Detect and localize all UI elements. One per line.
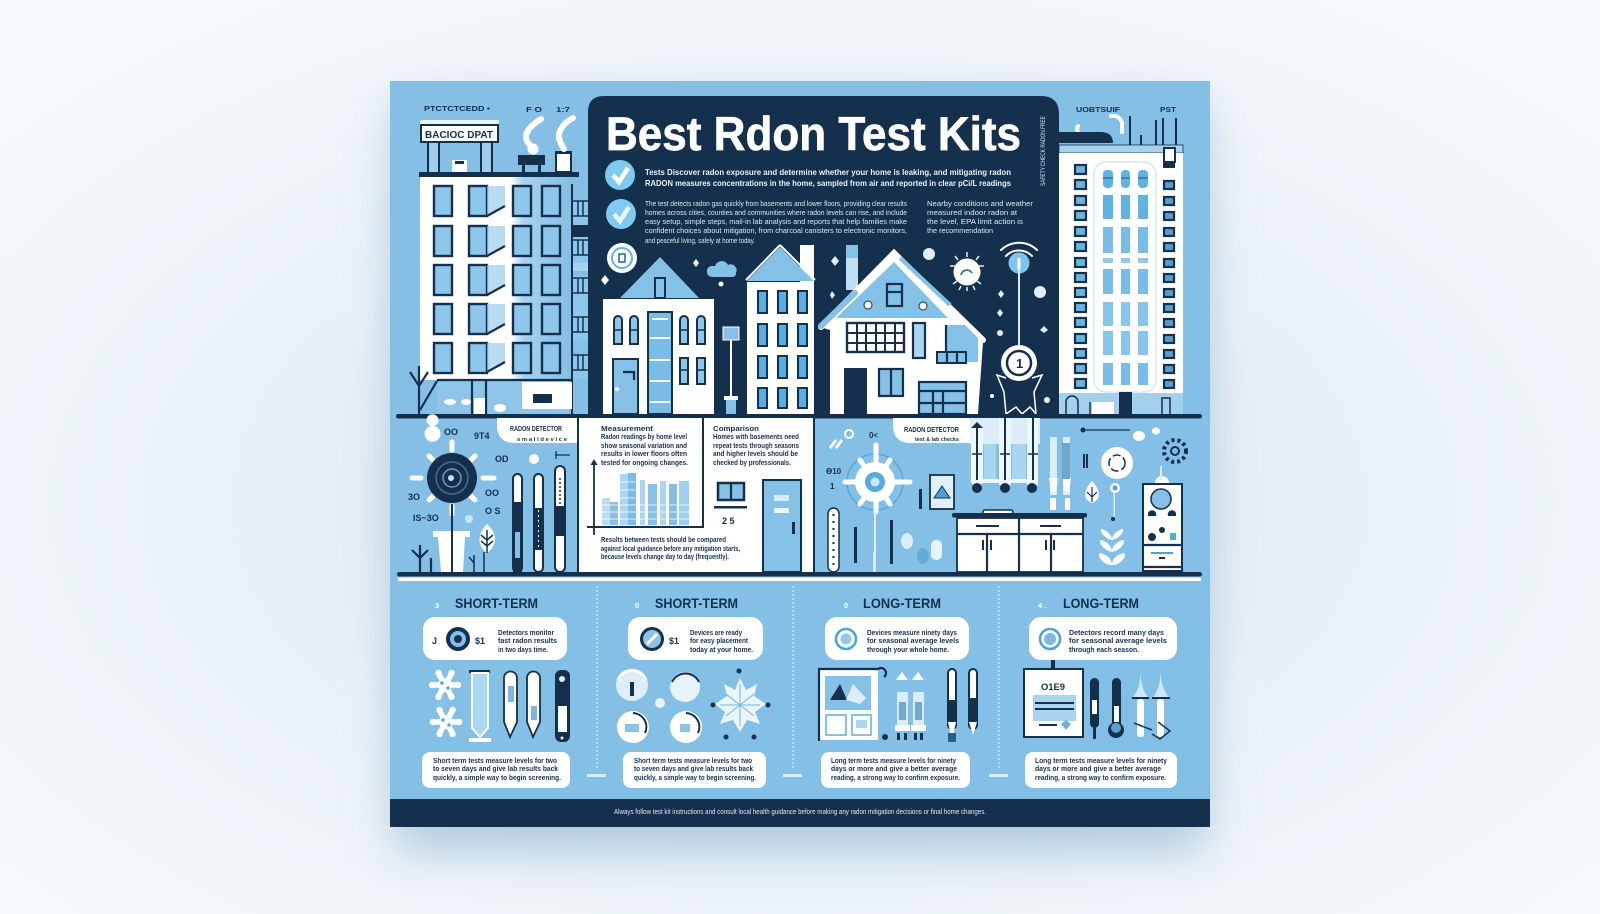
ground line 2	[397, 572, 1202, 576]
heading: SHORT-TERM	[655, 595, 738, 611]
left apartment building	[410, 104, 588, 414]
footer bar	[390, 799, 1210, 827]
bar chart	[602, 473, 689, 525]
text card	[623, 752, 766, 788]
centre windows	[1103, 170, 1148, 385]
intro text	[645, 167, 1011, 188]
info card: Devices are ready	[690, 628, 743, 637]
text card	[422, 752, 570, 788]
gear badge	[1164, 440, 1186, 462]
text card: Short term tests measure levels for two	[634, 756, 752, 765]
info card	[628, 617, 763, 660]
building body	[420, 176, 572, 380]
body text column 2	[927, 199, 1034, 235]
sample vials	[895, 672, 926, 740]
test wand 3	[555, 466, 565, 572]
tower base	[1059, 393, 1183, 414]
counter with cabinets	[952, 510, 1087, 572]
thermometer pair	[1049, 437, 1071, 510]
info card: for seasonal average levels	[867, 636, 959, 645]
body text column 1: The test detects radon gas quickly from basements and lower floors, providing clear results	[645, 199, 907, 208]
townhouse left	[603, 257, 714, 414]
gauge labels: OD	[495, 454, 509, 464]
column 1: short-term	[422, 595, 570, 788]
text card: to seven days and give lab results back	[433, 764, 559, 773]
scale and tools: Ɵ10	[826, 467, 842, 476]
tower label: UOBTSUIF	[1076, 105, 1120, 114]
column 2: short-term: 0	[635, 601, 639, 610]
column 1: short-term: 3	[435, 601, 439, 610]
round gauge icons	[616, 669, 702, 743]
clipboard report	[1024, 660, 1083, 737]
lower text: Results between tests should be compared	[601, 535, 726, 544]
body text column 1	[645, 199, 907, 245]
body text column 2: the recommendation	[927, 226, 993, 235]
info card: in two days time.	[498, 645, 548, 654]
info card	[423, 617, 567, 660]
text card: days or more and give a better average	[1035, 764, 1161, 773]
snowflake icons	[429, 670, 462, 737]
leaf icon	[1085, 481, 1099, 503]
text card: quickly, a simple way to begin screening.	[634, 773, 756, 782]
body text column 1: homes across cities, counties and communities where radon levels can rise, and include	[645, 208, 907, 217]
scale and tools	[826, 430, 1088, 572]
gauge labels: 3O	[408, 492, 420, 502]
body text column 1: confident choices about mitigation, from charcoal canisters to electronic monitors,	[645, 226, 907, 235]
top label: PTCTCTCEDD •	[424, 104, 490, 113]
test wands	[1090, 678, 1124, 739]
text card: Short term tests measure levels for two	[433, 756, 557, 765]
twin vials	[504, 672, 540, 737]
gauge labels: OO	[444, 427, 458, 437]
info card	[825, 617, 969, 660]
info card: for easy placement	[690, 636, 748, 645]
text card: Long term tests measure levels for ninety	[1035, 756, 1168, 765]
info card: Devices measure ninety days	[867, 628, 957, 637]
large house	[820, 253, 983, 414]
chart text	[601, 424, 688, 467]
heading: SHORT-TERM	[455, 595, 538, 611]
chart text: Radon readings by home level	[601, 432, 687, 441]
body text column 1: and peaceful living, safely at home today.	[645, 236, 755, 245]
middle section: left radon tools	[408, 414, 577, 572]
middle section: right lab equipment	[826, 418, 1186, 572]
info card: $1	[475, 636, 485, 646]
heading: LONG-TERM	[1063, 595, 1139, 611]
test pens	[948, 669, 977, 742]
side text: Homes with basements need	[713, 432, 799, 441]
dividers	[597, 586, 999, 770]
body text column 2: Nearby conditions and weather	[927, 199, 1034, 208]
radon sun gauge	[412, 442, 494, 514]
gauge labels: O S	[485, 506, 501, 516]
middle section: white chart panel	[578, 418, 814, 572]
house badge icon	[607, 243, 637, 273]
body text column 2: measured indoor radon at	[927, 208, 1018, 217]
door	[613, 359, 638, 414]
info card: $1	[669, 636, 679, 646]
chart text: show seasonal variation and	[601, 441, 687, 450]
left apartment building: 1:7	[556, 105, 570, 114]
text card: quickly, a simple way to begin screening.	[433, 773, 561, 782]
title: Best Rdon Test Kits	[606, 107, 1021, 160]
info card: for seasonal average levels	[1069, 636, 1167, 645]
body text column 2: the level, EPA limit action is	[927, 217, 1023, 226]
sun sensor	[1101, 447, 1133, 521]
plant sprout	[1099, 529, 1125, 565]
column 3: long-term	[819, 595, 977, 788]
right window column	[1164, 181, 1174, 388]
rooftop sign: BACIOC DPAT	[425, 130, 493, 141]
house report card	[819, 668, 886, 741]
column 4: long-term	[1024, 595, 1177, 788]
lower text	[601, 535, 740, 561]
garage	[919, 382, 966, 414]
info card	[1029, 617, 1177, 660]
text card: reading, a strong way to confirm exposure.	[831, 773, 960, 782]
intro text: RADON measures concentrations in the home, sampled from air and reported in clear pCi/L readings	[645, 178, 1011, 188]
check icon 1	[605, 160, 635, 190]
dark title panel	[588, 96, 1059, 416]
sparkles	[601, 259, 724, 307]
hanging test tubes	[970, 418, 1040, 493]
storefront	[410, 366, 572, 414]
right tower: PST	[1160, 105, 1176, 114]
plant pot	[433, 504, 470, 572]
vertical side text: SAFETY CHECK RADON FREE	[1041, 116, 1047, 186]
check icon 2	[606, 199, 636, 229]
burst icon	[710, 668, 770, 740]
clipboard report: O1E9	[1041, 682, 1065, 692]
lower text: because levels change day to day (frequently).	[601, 552, 729, 561]
snowflakes and stars	[830, 248, 1048, 336]
column 2: short-term	[616, 595, 770, 788]
wifi sensor and medal: 1	[1016, 356, 1023, 371]
gear sensor	[845, 445, 910, 572]
door	[844, 368, 867, 414]
narrow townhouse	[746, 245, 858, 414]
chart text: Measurement	[601, 424, 654, 433]
text card: reading, a strong way to confirm exposure.	[1035, 773, 1166, 782]
callout 2	[893, 418, 970, 443]
side text: and higher levels should be	[713, 449, 798, 458]
infographic poster panel	[390, 81, 1210, 827]
callout 2: test & lab checks	[915, 437, 959, 443]
window grid	[434, 186, 560, 373]
body text column 1: easy setup, simple steps, mail-in lab analysis and reports that help families make	[645, 217, 907, 226]
info card: J	[432, 636, 437, 646]
text card	[1025, 752, 1177, 788]
info card: through your whole home.	[867, 645, 949, 654]
info card: through each season.	[1069, 645, 1139, 654]
door	[763, 480, 801, 572]
gauge labels: OO	[485, 488, 499, 498]
column 4: long-term: 4 .	[1038, 601, 1046, 610]
funnel droppers	[1132, 670, 1170, 739]
side text: Comparison	[713, 424, 759, 433]
callout 1	[497, 418, 577, 443]
radon gauge icon	[950, 252, 984, 291]
callout 1: s m a l l d e v i c e	[517, 437, 567, 443]
left apartment building: F O	[526, 105, 542, 114]
rooftop sign	[420, 120, 499, 173]
side balconies	[573, 200, 588, 379]
chart axis	[590, 459, 598, 535]
text card: to seven days and give lab results back	[634, 764, 754, 773]
rooftop chimneys and steam	[518, 118, 573, 173]
framed picture	[930, 475, 954, 509]
dark monitor	[555, 670, 570, 742]
glass tube	[469, 670, 491, 742]
monitor device	[1143, 466, 1182, 571]
column 3: long-term: 0	[844, 601, 848, 610]
side text: repeat tests through seasons	[713, 441, 799, 450]
left window column	[1075, 165, 1086, 388]
right tower	[1059, 105, 1183, 415]
window	[714, 483, 747, 526]
intro text: Tests Discover radon exposure and determine whether your home is leaking, and mitigating radon	[645, 167, 1011, 177]
info card: Detectors record many days	[1069, 628, 1164, 637]
side text	[713, 424, 799, 467]
wifi sensor and medal	[990, 243, 1050, 414]
gauge labels: IS~3O	[413, 513, 439, 523]
scale and tools: 1	[830, 482, 835, 491]
text card	[821, 752, 970, 788]
chart text: results in lower floors often	[601, 449, 687, 458]
scale and tools: 0<	[869, 431, 878, 440]
info card: fast radon results	[498, 636, 557, 645]
heading: LONG-TERM	[863, 595, 941, 611]
leaf	[469, 524, 495, 572]
test wand 1	[513, 474, 522, 572]
lower text: against local guidance before any mitigation starts,	[601, 544, 740, 553]
chart text: tested for ongoing changes.	[601, 458, 688, 467]
callout 2: RADON DETECTOR	[904, 425, 959, 434]
info card: Detectors monitor	[498, 628, 554, 637]
grid window	[847, 323, 904, 352]
street lamp	[723, 327, 739, 414]
gauge labels	[408, 414, 509, 523]
info card: today at your home.	[690, 645, 753, 654]
callout 1: RADON DETECTOR	[510, 424, 562, 433]
footer bar: Always follow test kit instructions and consult local health guidance before making any radon mitigation decisions or final home changes.	[614, 807, 986, 816]
gauge labels: 9T4	[474, 431, 490, 441]
text card: Long term tests measure levels for ninety	[831, 756, 957, 765]
ground line	[396, 414, 1202, 418]
cloud	[707, 261, 737, 277]
test wand 2	[534, 474, 543, 572]
window: 2 5	[722, 516, 735, 526]
text card: days or more and give a better average	[831, 764, 957, 773]
side text: checked by professionals.	[713, 458, 791, 467]
